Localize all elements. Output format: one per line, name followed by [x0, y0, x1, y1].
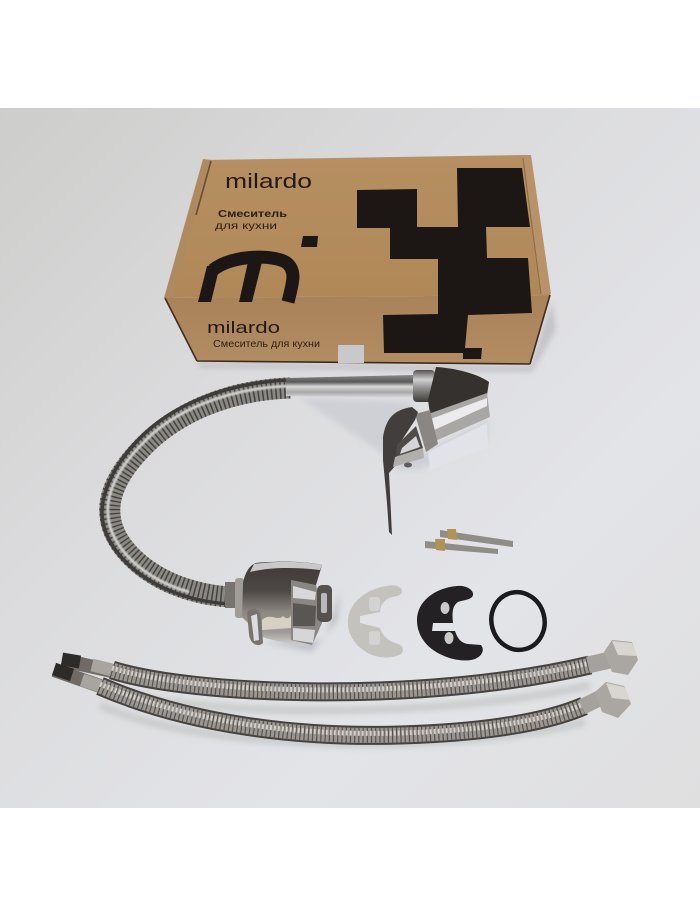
o-ring — [485, 586, 551, 656]
hose two nut — [595, 682, 631, 718]
spray head nozzle — [317, 585, 332, 622]
faucet upper cap — [428, 367, 489, 414]
spray head top highlight — [250, 562, 322, 572]
box front face — [165, 295, 550, 364]
faucet collar — [413, 370, 435, 402]
spray head chrome front — [291, 580, 322, 645]
hose one braid — [112, 665, 590, 692]
silver sticker — [338, 345, 364, 363]
black pixel pattern — [357, 168, 532, 359]
faucet body — [383, 367, 490, 535]
brass nut one — [447, 529, 457, 540]
box edge shading — [165, 295, 550, 364]
hose shadow — [100, 685, 590, 744]
flexible hose — [102, 380, 290, 604]
pull-out spout tube — [286, 375, 413, 398]
box top face — [165, 155, 550, 298]
hose one collar — [588, 660, 610, 665]
product title top: Смеситель — [218, 208, 288, 220]
box left flap — [164, 159, 211, 298]
bolt one — [440, 530, 513, 547]
faucet cylinder — [417, 393, 490, 442]
brand name top: milardo — [225, 171, 312, 193]
bolt two — [425, 541, 498, 554]
spray head — [225, 562, 332, 645]
logo dot — [301, 236, 318, 247]
cardboard box — [164, 155, 551, 364]
braided hose one — [62, 640, 638, 692]
hose one tip fitting — [62, 660, 112, 671]
faucet shadows — [300, 398, 488, 470]
spray head body — [242, 562, 322, 645]
hose two braid — [100, 686, 584, 735]
hose two collar — [582, 698, 600, 707]
product subtitle top: для кухни — [215, 220, 277, 232]
spray head shadow — [262, 590, 340, 652]
faucet lever — [383, 407, 418, 535]
brand name front: milardo — [207, 318, 280, 337]
box right flap — [522, 155, 551, 295]
hose one nut — [604, 640, 638, 675]
spray head connector — [225, 582, 237, 608]
metal washer — [348, 585, 403, 658]
product title front: Смеситель для кухни — [213, 339, 320, 350]
box shadow — [197, 300, 556, 372]
photo background — [0, 108, 700, 808]
faucet reflected base — [428, 423, 488, 470]
mounting bolts — [425, 529, 513, 554]
black gasket — [417, 586, 483, 660]
brass nut two — [435, 539, 445, 551]
hose two tip fitting — [54, 670, 100, 686]
spray head trigger — [247, 609, 263, 645]
braided hose two — [54, 669, 631, 735]
spray head lower reflection — [262, 615, 291, 630]
faucet base — [393, 448, 424, 467]
logo m — [198, 257, 293, 302]
